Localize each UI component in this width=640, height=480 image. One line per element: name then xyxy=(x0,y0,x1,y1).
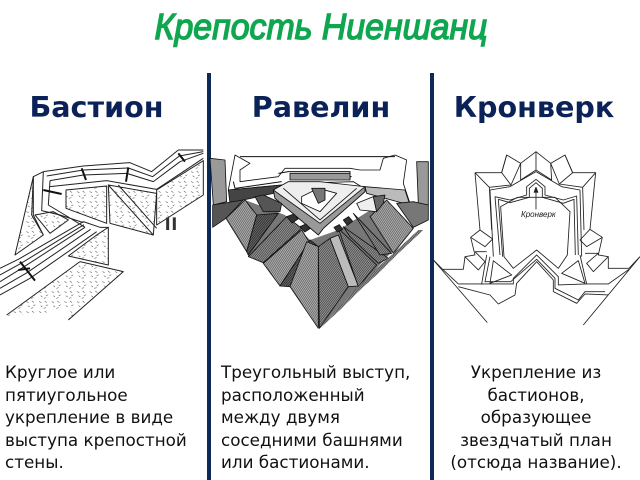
text: crownwork description: Укрепление из xyxy=(471,362,601,382)
text: bastion description: стены. xyxy=(5,452,64,472)
outer star outline xyxy=(433,152,640,269)
text: crownwork description: (отсюда название). xyxy=(450,452,622,472)
text: bastion description xyxy=(5,362,187,472)
bastion stippled ground xyxy=(7,262,123,320)
bastion pyramids xyxy=(226,200,257,252)
column divider left xyxy=(207,73,211,480)
text: ravelin description: Треугольный выступ, xyxy=(221,362,410,382)
rear rampart xyxy=(210,158,227,205)
crownwork label: Кронверк xyxy=(521,210,557,219)
illustration: crownwork xyxy=(433,152,640,325)
text: bastion description: Круглое или xyxy=(5,362,115,382)
bastion parapet xyxy=(43,150,203,189)
illustration: ravelin xyxy=(210,155,428,328)
column divider right xyxy=(430,73,434,480)
text: crownwork description: образующее xyxy=(481,407,591,427)
bastion wall faces xyxy=(15,161,203,265)
outworks xyxy=(255,195,282,212)
title: Крепость Ниеншанц xyxy=(155,6,487,47)
text: ravelin description: расположенный xyxy=(221,385,365,405)
text: crownwork description xyxy=(450,362,622,472)
inner rampart xyxy=(490,172,582,257)
text: crownwork description: звездчатый план xyxy=(460,430,612,450)
text: ravelin description xyxy=(220,362,410,472)
figures xyxy=(168,217,174,230)
heading: Равелин: Равелин xyxy=(252,90,390,124)
text: crownwork description: бастионов, xyxy=(487,385,585,405)
pyramid base xyxy=(226,200,413,328)
arrow xyxy=(535,187,537,209)
text: ravelin description: между двумя xyxy=(221,407,340,427)
gate squares xyxy=(287,214,353,232)
text: ravelin description: или бастионами. xyxy=(221,452,370,472)
ravelin centre xyxy=(273,182,365,235)
text: ravelin description: соседними башнями xyxy=(221,430,403,450)
ground hatch shadow xyxy=(320,230,423,328)
text: bastion description: выступа крепостной xyxy=(5,430,187,450)
heading: Кронверк: Кронверк xyxy=(454,90,614,124)
bastion dark details xyxy=(18,153,185,281)
text: bastion description: укрепление в виде xyxy=(5,407,173,427)
heading: Бастион: Бастион xyxy=(29,90,164,124)
illustration: bastion xyxy=(0,150,203,320)
text: bastion description: пятиугольное xyxy=(5,385,128,405)
